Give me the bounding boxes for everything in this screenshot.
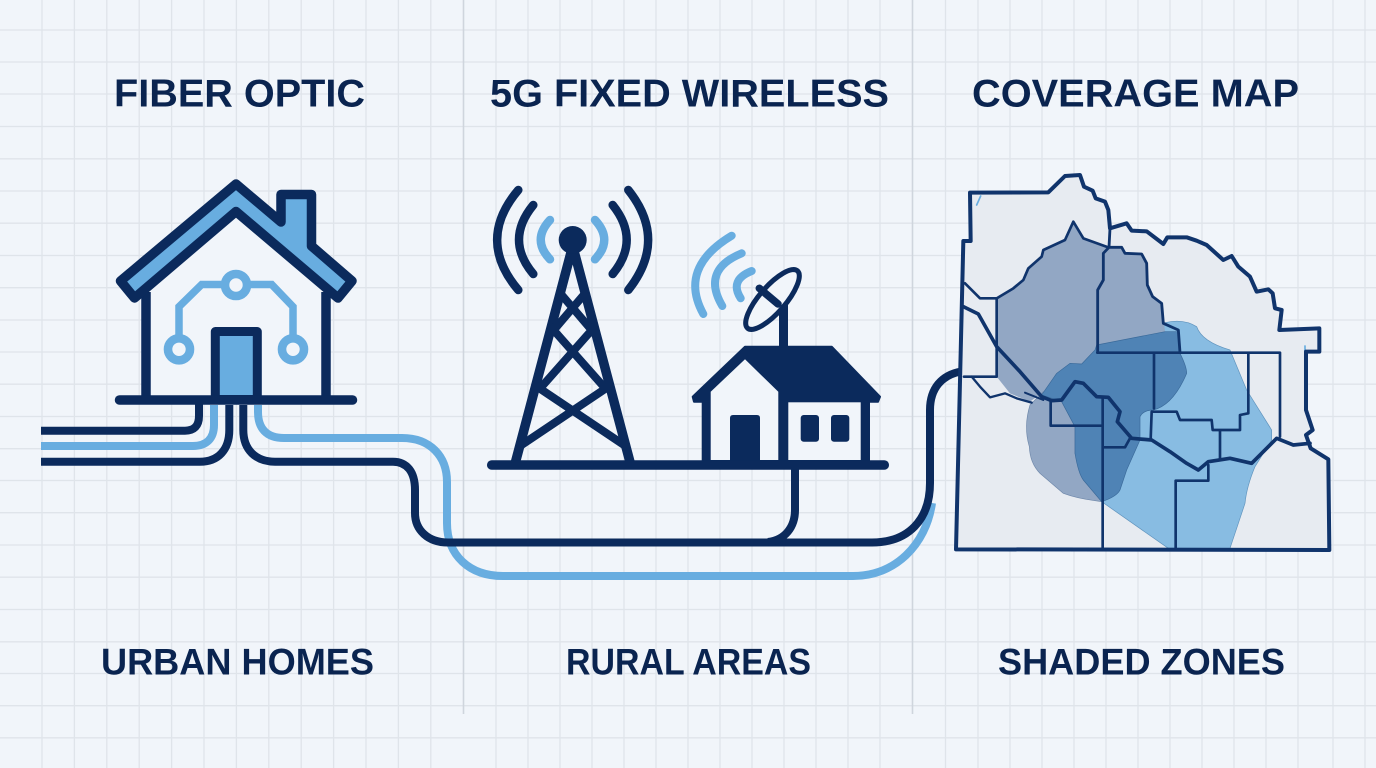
circuit node: right bbox=[282, 338, 304, 360]
fiber: light line running from house to map bbox=[258, 405, 932, 576]
map inner boundaries bbox=[963, 222, 1310, 549]
boundary: county grid bbox=[1051, 353, 1280, 549]
boundary: river bbox=[963, 307, 1310, 470]
tower braces bbox=[522, 293, 624, 445]
wall strokes bbox=[146, 292, 326, 400]
label: shaded zones: SHADED ZONES bbox=[998, 642, 1285, 682]
map small accents bbox=[977, 196, 1305, 352]
window right bbox=[831, 415, 849, 442]
circuit traces bbox=[168, 274, 304, 360]
title: coverage map: COVERAGE MAP bbox=[972, 72, 1299, 116]
door bbox=[215, 332, 257, 400]
signal waves: light bbox=[541, 220, 604, 259]
shaded zone: grey coverage upper bbox=[997, 222, 1165, 402]
signal waves: dark bbox=[497, 190, 648, 290]
fiber: left light line bbox=[41, 405, 214, 446]
house body bbox=[702, 395, 870, 465]
house roof bbox=[693, 347, 880, 402]
satellite dish bbox=[738, 262, 807, 337]
label: rural areas: RURAL AREAS bbox=[566, 642, 811, 682]
title: fiber optic: FIBER OPTIC bbox=[114, 72, 365, 116]
tower legs bbox=[516, 246, 630, 462]
circuit node: top bbox=[225, 274, 247, 296]
icon: urban home with circuit bbox=[120, 184, 352, 400]
circuit node: left bbox=[168, 338, 190, 360]
fiber: left upper dark line bbox=[41, 404, 199, 431]
fiber: left lower dark line bbox=[41, 405, 229, 462]
boundary: river fork bbox=[1025, 393, 1043, 400]
fiber: branch from rural ground to main line bbox=[768, 465, 795, 542]
roof and chimney bbox=[120, 184, 352, 298]
dish mast bbox=[779, 305, 788, 350]
icon: rural house with satellite dish bbox=[492, 236, 884, 465]
house walls bbox=[146, 212, 326, 400]
fiber: dark line running from house to map bbox=[243, 372, 961, 542]
tower top bbox=[559, 226, 587, 254]
door bbox=[730, 415, 760, 460]
dish arm bbox=[759, 288, 778, 304]
dish bowl bbox=[738, 262, 807, 337]
map outline bbox=[956, 175, 1329, 550]
shaded zone: overlap bbox=[1042, 332, 1187, 502]
boundary: upper divide bbox=[1098, 228, 1180, 353]
boundary: western box bbox=[964, 283, 997, 377]
connecting fiber lines bbox=[41, 372, 961, 576]
icon: cell tower with signal bbox=[497, 190, 648, 462]
map outline fill bbox=[956, 175, 1329, 550]
side room bbox=[788, 402, 861, 460]
boundary: grey zone edge bbox=[997, 222, 1108, 298]
label: urban homes: URBAN HOMES bbox=[101, 642, 374, 682]
shaded zone: light coverage bbox=[1102, 321, 1272, 548]
coverage map bbox=[956, 175, 1329, 550]
title: 5G fixed wireless: 5G FIXED WIRELESS bbox=[490, 72, 889, 116]
dish signal waves bbox=[695, 236, 752, 314]
ground line bbox=[120, 395, 352, 405]
shaded zone: grey coverage lower bbox=[1026, 392, 1102, 502]
gable section bbox=[711, 359, 778, 460]
boundary: south-west branch bbox=[972, 377, 1032, 403]
trace path bbox=[179, 284, 293, 349]
ground line bbox=[492, 460, 884, 470]
window left bbox=[801, 415, 819, 442]
tower lattice bbox=[516, 246, 630, 462]
